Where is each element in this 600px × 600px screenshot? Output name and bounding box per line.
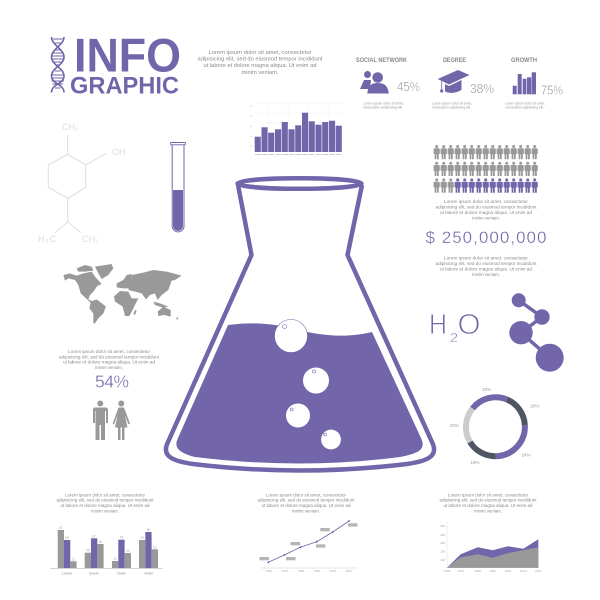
stat: growth: Lorem ipsum dolor sit amet,: [505, 102, 545, 106]
diagram: molecular structure: CH: [82, 234, 95, 244]
chart: grouped bars: 78: [120, 536, 123, 540]
chart: top bar chart: 50: [250, 126, 253, 128]
chart: area: 2010: [520, 569, 527, 573]
chart: grouped bars: Lorem: [62, 572, 72, 576]
formula: H2O: 2: [450, 330, 458, 345]
chart: grouped bars: 96: [147, 528, 150, 532]
flask: [166, 178, 434, 470]
text block: area chart: [440, 492, 537, 513]
text block: intro: ut labore et dolore magna aliqua. Ut enim ad: [204, 63, 317, 69]
chart: top bar chart: [250, 103, 344, 154]
stat: social network: SOCIAL NETWORK: [356, 58, 408, 64]
text block: gender: adipisicing elit, sed do eiusmod tempor incididunt: [59, 354, 160, 359]
title: [70, 28, 181, 100]
big number: amount: $ 250,000,000: [426, 228, 546, 247]
chart: donut: 24%: [521, 453, 531, 458]
title: INFO: [74, 28, 181, 82]
bubbles: [274, 320, 341, 450]
text block: area chart: minim veniam.: [474, 508, 502, 513]
chart: area: 1990: [489, 569, 496, 573]
chart: line: 1980: [298, 569, 305, 573]
chart: grouped bars: 63: [99, 540, 102, 544]
text block: line chart: ut labore et dolore magna aliqua. Ut enim ad: [262, 503, 351, 508]
chart: top bar chart: 10: [250, 146, 253, 148]
diagram: molecular structure: [38, 122, 126, 245]
stat: social network: 45%: [397, 79, 420, 94]
text block: people: adipisicing elit, sed do eiusmod tempor incididunt: [436, 204, 537, 210]
chart: line: 1990: [314, 569, 321, 573]
chart: top bar chart: 30: [250, 136, 253, 138]
chart: grouped bars: 73: [140, 536, 144, 540]
chart: grouped bars: 52: [153, 545, 157, 549]
text block: bar chart: minim veniam.: [91, 508, 119, 513]
text block: line chart: minim veniam.: [292, 508, 320, 513]
map: world: [63, 264, 182, 323]
chart: top bar chart: 90: [250, 106, 253, 108]
stat: degree: consectetur adipisicing elit.: [432, 106, 471, 110]
chart: donut: 20%: [530, 404, 540, 409]
chart: area: 100: [440, 558, 446, 562]
stat: degree: [432, 58, 494, 110]
chart: donut: [450, 387, 540, 465]
chart: area: 2000: [505, 569, 512, 573]
chart: area: 2020: [535, 569, 542, 573]
chart: grouped bars: 65: [65, 536, 69, 540]
chart: donut: 20%: [482, 387, 491, 392]
chart: area: 1960: [444, 569, 451, 573]
chart: area: 1970: [457, 569, 464, 573]
text block: people: ut labore et dolore magna aliqua. Ut enim ad: [440, 210, 533, 215]
stat: growth: [505, 58, 563, 110]
diagram: molecular structure: 3: [75, 127, 78, 133]
chart: grouped bars: 43: [126, 549, 130, 553]
text block: area chart: adipisicing elit, sed do eiusmod tempor incididunt: [440, 498, 537, 503]
text block: gender: ut labore et dolore magna aliqua. Ut enim ad: [63, 360, 156, 365]
chart: grouped bars: Ipsum: [89, 572, 99, 576]
text block: gender: [59, 349, 160, 370]
flask liquid: [176, 323, 423, 464]
text block: amount: minim veniam.: [472, 272, 500, 277]
chart: donut: 16%: [470, 460, 480, 465]
chart: line: 2010: [346, 569, 353, 573]
chart: area: [440, 522, 542, 573]
stat: social network: consectetur adipisicing elit.: [363, 106, 403, 110]
chart: area: 400: [440, 533, 446, 537]
icon: graduation cap: [438, 70, 470, 93]
stat: degree: DEGREE: [443, 58, 466, 64]
text block: intro: adipisicing elit, sed do eiusmod tempor incididunt: [198, 56, 323, 62]
text block: intro: minim veniam.: [242, 70, 278, 76]
chart: people pictogram: [434, 145, 538, 193]
icon: molecule: [509, 293, 564, 372]
chart: grouped bars: 45: [86, 549, 90, 553]
stat: degree: Lorem ipsum dolor sit amet,: [432, 102, 472, 106]
chart: area: 1980: [474, 569, 481, 573]
text block: bar chart: [56, 492, 154, 513]
chart: grouped bars: 21: [72, 557, 75, 561]
text block: gender: minim veniam.: [95, 365, 123, 370]
chart: line: 2000: [330, 569, 337, 573]
chart: grouped bars: 67: [92, 534, 96, 538]
diagram: molecular structure: 3: [46, 239, 49, 245]
chart: line: 1970: [282, 569, 289, 573]
chart: area: 200: [440, 550, 446, 554]
icon: people: [360, 71, 389, 94]
text block: amount: adipisicing elit, sed do eiusmod tempor incididunt: [436, 261, 537, 266]
text block: area chart: ut labore et dolore magna aliqua. Ut enim ad: [444, 503, 533, 508]
formula: H2O: O: [458, 309, 480, 341]
text block: amount: [436, 256, 537, 277]
stat: growth: 75%: [541, 82, 563, 98]
text block: people: Lorem ipsum dolor sit amet, consectetur: [444, 199, 529, 204]
chart: area: 300: [440, 541, 446, 545]
icon: test tube: [170, 142, 186, 232]
text block: amount: ut labore et dolore magna aliqua. Ut enim ad: [440, 266, 533, 272]
text block: line chart: Lorem ipsum dolor sit amet, consectetur: [266, 492, 346, 497]
diagram: molecular structure: C: [50, 234, 56, 244]
text block: bar chart: Lorem ipsum dolor sit amet, consectetur: [65, 492, 145, 497]
icon: DNA helix: [52, 37, 64, 92]
text block: people: [436, 199, 537, 220]
chart: top bar chart: 70: [250, 116, 253, 118]
stat: growth: consectetur adipisicing elit.: [505, 106, 544, 110]
chart: donut: 20%: [450, 423, 459, 428]
chart: grouped bars: 23: [113, 557, 117, 561]
chart: line: [260, 520, 358, 573]
text block: line chart: adipisicing elit, sed do eiusmod tempor incididunt: [258, 498, 355, 503]
chart: grouped bars: [50, 526, 163, 576]
chart: grouped bars: Dolor: [117, 572, 127, 576]
text block: area chart: Lorem ipsum dolor sit amet, consectetur: [448, 492, 528, 497]
chart: line: 1960: [266, 569, 273, 573]
text block: bar chart: ut labore et dolore magna aliqua. Ut enim ad: [60, 503, 150, 508]
stat: growth: GROWTH: [511, 58, 537, 64]
text block: line chart: [258, 492, 355, 513]
text block: intro: [198, 50, 323, 76]
flask rim: [238, 178, 362, 189]
formula: H2O: H: [429, 309, 447, 341]
chart: area: 500: [440, 524, 446, 528]
icon: growth bars: [513, 72, 536, 94]
text block: intro: Lorem ipsum dolor sit amet, consectetur: [208, 50, 312, 56]
text block: amount: Lorem ipsum dolor sit amet, consectetur: [444, 256, 529, 260]
stat: social network: [356, 58, 420, 110]
diagram: molecular structure: OH: [112, 147, 126, 157]
chart: grouped bars: 87: [59, 526, 63, 530]
text block: people: minim veniam.: [472, 216, 500, 220]
diagram: molecular structure: CH: [62, 122, 75, 132]
title: GRAPHIC: [70, 72, 179, 100]
diagram: molecular structure: H: [38, 234, 44, 244]
stat: social network: Lorem ipsum dolor sit amet,: [363, 102, 404, 106]
flask outline: [166, 185, 434, 470]
big number: 54%: 54%: [95, 372, 129, 392]
diagram: molecular structure: 3: [95, 239, 98, 245]
text block: bar chart: adipisicing elit, sed do eiusmod tempor incididunt: [56, 498, 154, 503]
formula: H2O: [429, 309, 480, 345]
icon: man and woman: [93, 400, 130, 440]
stat: degree: 38%: [470, 81, 494, 96]
chart: grouped bars: Amet: [144, 572, 153, 576]
text block: gender: Lorem ipsum dolor sit amet, consectetur: [68, 349, 150, 354]
